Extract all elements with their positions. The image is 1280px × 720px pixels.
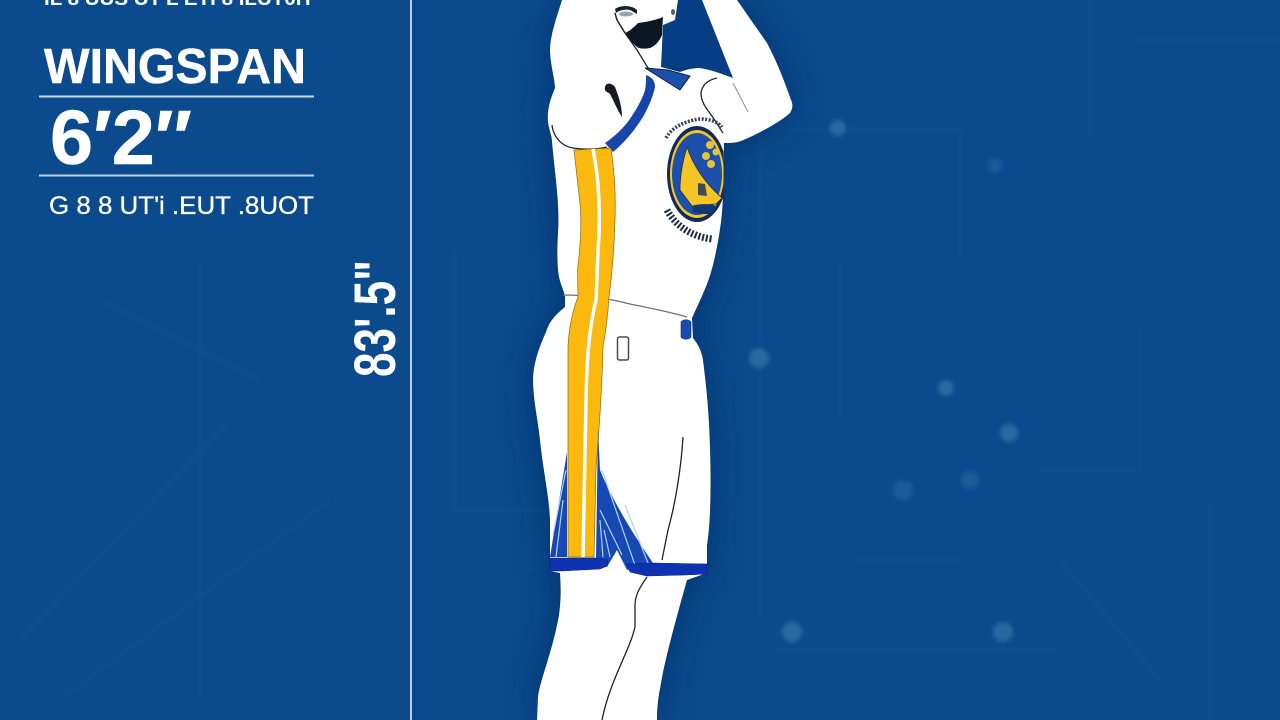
vertical measurement line xyxy=(410,0,412,720)
white stripe xyxy=(583,149,599,557)
white silhouette xyxy=(533,0,792,720)
face features xyxy=(615,6,675,33)
waist tag xyxy=(681,320,691,339)
gold side stripe xyxy=(568,148,615,557)
caption below value: G 8 8 UT'i .EUT .8UOT xyxy=(49,192,314,220)
rotated height label: 83'.5" xyxy=(343,260,408,377)
armpit mark xyxy=(605,84,622,117)
neck gap shading xyxy=(661,0,733,78)
right side panel xyxy=(596,430,653,570)
chest logo xyxy=(667,126,727,222)
divider: upper rule xyxy=(39,96,314,98)
logo lettering bottom xyxy=(667,210,712,239)
bridge xyxy=(680,147,722,206)
shorts logo tag xyxy=(618,337,628,360)
shorts hem xyxy=(550,558,707,576)
pinstripes xyxy=(553,470,648,565)
divider: lower rule xyxy=(39,174,314,176)
figure shadow xyxy=(533,0,792,720)
value: 6'2": 6′2″ xyxy=(50,95,192,181)
left side panel xyxy=(550,452,567,557)
bridge detail xyxy=(698,183,707,196)
heading: wingspan: WINGSPAN xyxy=(44,40,306,94)
bridge base xyxy=(692,204,716,214)
player figure xyxy=(533,0,792,720)
sleeve trim xyxy=(605,75,655,152)
beard xyxy=(625,17,663,49)
collar trim xyxy=(645,68,690,90)
arm and torso lines xyxy=(552,33,748,720)
sun xyxy=(702,141,720,168)
logo lettering top xyxy=(666,119,722,138)
